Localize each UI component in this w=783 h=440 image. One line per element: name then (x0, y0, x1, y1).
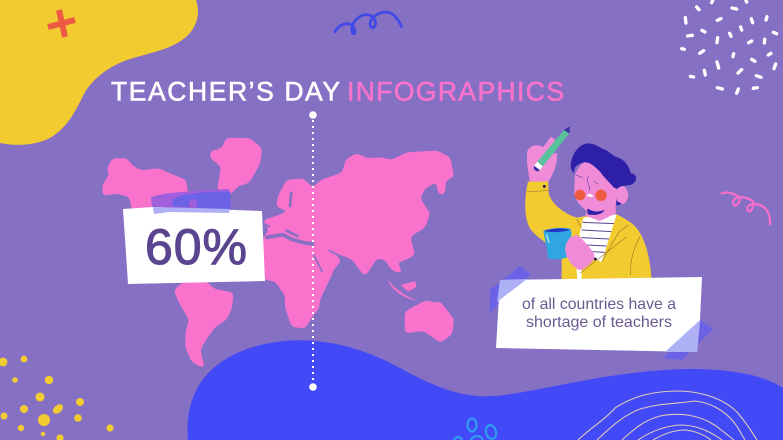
white dash cluster (682, 0, 777, 93)
jacket (525, 181, 652, 282)
line start dot (309, 111, 317, 119)
face (574, 161, 617, 216)
shirt (579, 214, 617, 262)
Australia (405, 300, 454, 343)
South America (174, 277, 233, 369)
shirt stripes (581, 222, 614, 252)
raised hand (527, 137, 557, 182)
icon: red plus (48, 10, 75, 37)
note: shortage text (496, 277, 702, 352)
collar shadow (587, 208, 605, 215)
nose and mouth (576, 175, 598, 191)
contour lines (578, 391, 757, 440)
neck (585, 198, 616, 221)
note: shortage text: shortage of teachers (526, 314, 672, 331)
note: 60%: 60% (145, 219, 247, 275)
line end dot (309, 383, 317, 391)
teacher illustration (525, 126, 652, 282)
note: shortage text: of all countries have a (522, 296, 676, 313)
cheeks (575, 190, 585, 200)
world map (103, 138, 454, 369)
Greenland (210, 138, 262, 196)
blue rings (454, 418, 498, 440)
hair (571, 143, 636, 189)
blue squiggle (335, 12, 402, 34)
dotted line (312, 120, 314, 382)
note: 60% (123, 207, 265, 284)
tape left (490, 266, 531, 313)
tape on 60% note (152, 190, 230, 209)
lapel lines (527, 191, 640, 275)
pencil (534, 130, 569, 170)
Indonesia (388, 281, 415, 300)
yellow corner blob (0, 0, 198, 145)
mug (543, 228, 572, 259)
title: TEACHER’S DAY (111, 76, 340, 106)
continents (103, 138, 454, 369)
title accent: INFOGRAPHICS (347, 76, 564, 106)
sleeve buttons (594, 257, 597, 260)
holding hand (565, 235, 595, 270)
tape right (663, 320, 713, 360)
blue wave blob (188, 340, 783, 440)
North America (103, 158, 197, 230)
yellow dots (0, 356, 114, 440)
Eurasia and Africa (262, 151, 454, 328)
Mediterranean and inland seas (265, 193, 340, 271)
Borneo (402, 282, 416, 291)
ear (616, 186, 628, 204)
pink squiggle (722, 193, 770, 224)
